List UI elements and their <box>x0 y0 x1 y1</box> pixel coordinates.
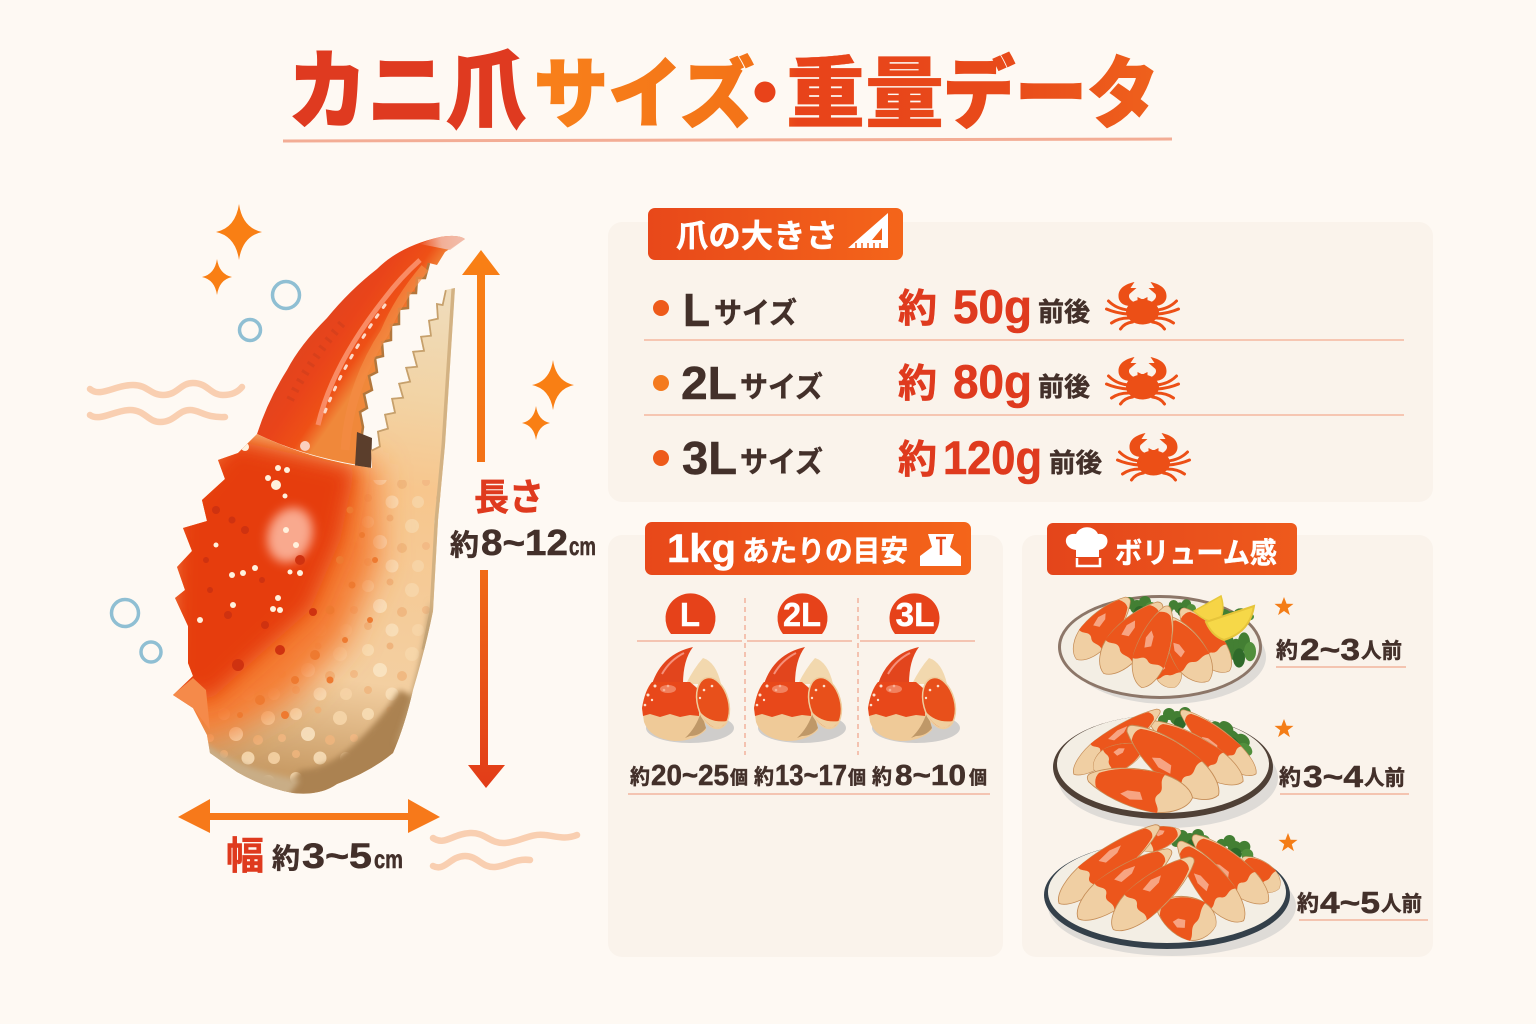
decorative bubbles <box>112 282 962 906</box>
label: 4-5 servings: 約 <box>1297 886 1319 918</box>
row: 2L size: 80g <box>953 355 1032 408</box>
column: L: L <box>680 596 700 633</box>
row: 3L size: 3L <box>682 432 737 484</box>
label: length: 8~12 <box>481 522 568 563</box>
badge: 1kgあたりの目安: あたりの目安 <box>742 528 908 570</box>
decorative waves <box>90 383 577 867</box>
column: 3L: 3L <box>896 596 934 633</box>
label: width <box>226 825 403 880</box>
measurement arrow: width <box>178 799 440 880</box>
badge: 爪の大きさ <box>648 208 903 260</box>
label: length: 長さ <box>474 467 544 521</box>
row: 2L size <box>653 353 1090 409</box>
column: L: 約 <box>630 761 650 791</box>
label: 4-5 servings: 人前 <box>1381 888 1422 918</box>
dark gap shadow <box>355 432 372 468</box>
label: 4-5 servings: 4~5 <box>1320 885 1380 920</box>
column: 2L: 13~17 <box>775 760 847 792</box>
column: L <box>630 593 748 792</box>
title: カニ爪 サイズ・重量データ: サイズ <box>534 33 754 143</box>
column: 2L <box>754 593 866 792</box>
column: 2L: 約 <box>754 761 774 791</box>
label: width: 幅 <box>226 825 264 880</box>
upper finger <box>257 236 465 465</box>
label: 2-3 servings: 約 <box>1276 633 1298 665</box>
column: 3L: 約 <box>872 761 892 791</box>
label: 4-5 servings <box>1278 833 1428 920</box>
title: カニ爪 サイズ・重量データ: データ <box>943 32 1159 144</box>
row: 2L size: 2L <box>681 357 737 409</box>
panel: claw size <box>608 208 1433 502</box>
row: 3L size: 前後 <box>1049 443 1102 480</box>
icon: crab L <box>1106 282 1178 329</box>
title: カニ爪 サイズ・重量データ <box>283 21 1172 146</box>
column: L: 個 <box>730 764 748 790</box>
measurement arrow: length <box>450 250 596 788</box>
panel: per 1kg <box>608 522 1003 957</box>
badge: ボリューム感: ボリューム感 <box>1115 530 1277 572</box>
badge: 1kgあたりの目安 <box>645 522 971 575</box>
claw body <box>173 288 455 794</box>
label: 3-4 servings: 約 <box>1279 760 1301 792</box>
badge: ボリューム感 <box>1047 523 1297 575</box>
row: 3L size: 約 <box>898 429 937 485</box>
column: 2L: 2L <box>783 596 821 633</box>
plate: medium <box>1053 699 1278 828</box>
label: width: cm <box>374 844 403 874</box>
badge: 1kgあたりの目安: 1kg <box>667 527 736 571</box>
label: width: 3~5 <box>302 837 372 876</box>
decorative sparkles <box>202 204 574 440</box>
grid lines <box>628 598 990 794</box>
badge: 爪の大きさ: 爪の大きさ <box>676 211 838 257</box>
title: カニ爪 サイズ・重量データ: カニ爪 <box>288 21 526 146</box>
label: width: 約 <box>272 837 300 877</box>
row: 3L size: 120g <box>943 431 1042 484</box>
label: length: 約 <box>450 522 479 564</box>
icon: crab 3L <box>1118 433 1190 480</box>
label: 2-3 servings: 2~3 <box>1300 632 1360 667</box>
row: L size: 前後 <box>1038 292 1090 329</box>
label: 2-3 servings <box>1274 597 1406 667</box>
row: 3L size: サイズ <box>740 439 823 481</box>
row: 2L size: サイズ <box>740 364 823 406</box>
label: length: cm <box>569 531 596 561</box>
panel: volume <box>1022 523 1433 957</box>
column: L: 20~25 <box>651 760 729 792</box>
row: 2L size: 前後 <box>1038 367 1090 404</box>
orange lower spike <box>173 678 210 730</box>
row: 3L size <box>653 429 1102 485</box>
plate: large <box>1044 813 1296 956</box>
column: 3L <box>868 593 987 792</box>
row: L size <box>653 278 1090 336</box>
label: length <box>450 467 596 564</box>
plate: small <box>1058 588 1266 704</box>
icon: crab 2L <box>1106 357 1178 404</box>
column: 2L: 個 <box>848 764 866 790</box>
title: カニ爪 サイズ・重量データ: 重量 <box>786 32 944 144</box>
row: L size: サイズ <box>714 290 797 332</box>
illustration: large crab claw <box>160 236 470 810</box>
label: 3-4 servings: 3~4 <box>1303 759 1364 794</box>
label: 2-3 servings: 人前 <box>1361 635 1402 665</box>
row: 2L size: 約 <box>898 353 937 409</box>
row: L size: L <box>683 284 710 336</box>
label: 3-4 servings: 人前 <box>1364 762 1405 792</box>
row: L size: 約 <box>898 278 937 334</box>
row dividers <box>644 340 1404 415</box>
column: 3L: 8~10 <box>895 760 966 792</box>
column: 3L: 個 <box>969 764 987 790</box>
row: L size: 50g <box>953 280 1032 333</box>
label: 3-4 servings <box>1274 719 1409 794</box>
